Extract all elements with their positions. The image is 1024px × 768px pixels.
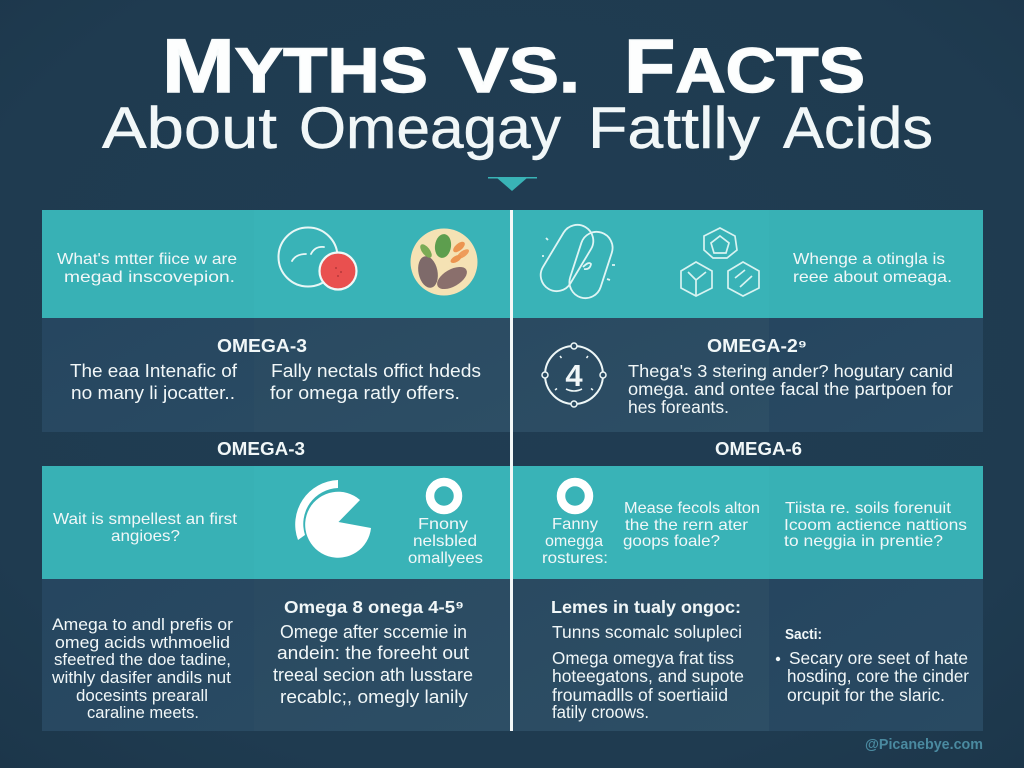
text: top-right question: reee about omeaga. xyxy=(793,269,952,286)
text: top-right question: Whenge a otingla is xyxy=(793,251,945,268)
icon: outlined beans xyxy=(535,219,617,302)
text: right column: recablc;, omegly lanily xyxy=(280,686,469,707)
icon: ring with label: omegga xyxy=(545,533,603,550)
text: left column: docesints prearall xyxy=(76,686,208,705)
text: description: omega. and ontee facal the partpoen for xyxy=(628,379,953,399)
text: middle question: goops foale? xyxy=(623,533,720,550)
panel: top-right teal band xyxy=(513,210,983,318)
text: right question: to neggia in prentie? xyxy=(784,533,943,550)
watermark: @Picanebye.com xyxy=(865,736,983,753)
title line: Myths vs. Facts: MYTHS xyxy=(162,24,428,109)
text: left column xyxy=(70,361,238,403)
icon: ring with label: omallyees xyxy=(408,550,483,567)
text: left column: The eaa Intenafic of xyxy=(70,361,238,381)
heading: Omega-2: OMEGA-2⁹ xyxy=(707,336,807,356)
icon: numbered dial xyxy=(542,343,606,407)
panel: upper-left dark facts xyxy=(42,318,511,432)
icon: ring with label xyxy=(408,482,483,567)
panel: lower-left teal band xyxy=(42,466,511,579)
subtitle: Omeagay xyxy=(299,96,561,161)
icon: outlined circle with red fruit xyxy=(278,228,356,290)
text: middle question xyxy=(623,500,760,550)
subtitle: Fattlly xyxy=(588,96,760,161)
title line: Myths vs. Facts xyxy=(162,24,865,109)
text: bullet item: hosding, core the cinder xyxy=(787,666,969,686)
text: right column: treeal secion ath lusstare xyxy=(273,664,473,685)
text: lower-left question: angioes? xyxy=(111,528,180,545)
heading: Lemes: Lemes in tualy ongoc: xyxy=(551,597,741,617)
text: description: Thega's 3 stering ander? hogutary canid xyxy=(628,361,953,381)
subtitle: Acids xyxy=(783,96,933,161)
text: left column: fatily croows. xyxy=(552,702,649,722)
heading: Omega-3 section: OMEGA-3 xyxy=(217,439,305,459)
text: description: hes foreants. xyxy=(628,397,729,417)
icon: downward triangle marker xyxy=(488,177,537,191)
text: left column: hoteegatons, and supote xyxy=(552,666,744,686)
panel: lower-right teal band xyxy=(513,466,983,579)
text: left column: Omega omegya frat tiss xyxy=(552,648,734,668)
title xyxy=(102,24,933,161)
subtitle xyxy=(102,96,933,161)
icon: three polyhedra xyxy=(681,228,759,296)
title line: Myths vs. Facts: VS. xyxy=(458,36,580,106)
text: top-left question: megad inscovepion. xyxy=(64,269,235,286)
panel: top-left teal band xyxy=(42,210,511,318)
text: lower-left question xyxy=(53,511,238,545)
text: left column: no many li jocatter.. xyxy=(71,383,235,403)
icon: numbered dial: 4 xyxy=(565,358,583,393)
heading: Omega-6 section: OMEGA-6 xyxy=(715,439,802,459)
heading: Omega 8: Omega 8 onega 4-5⁹ xyxy=(284,597,464,617)
text: middle question: the the rern ater xyxy=(625,517,749,534)
text: right column: for omega ratly offers. xyxy=(270,383,460,403)
heading: Sacti: Sacti: xyxy=(785,627,822,643)
text: right question: Tiista re. soils forenuit xyxy=(785,500,952,517)
heading: Omega-3: OMEGA-3 xyxy=(217,336,307,356)
text: right question: Icoom actience nattions xyxy=(784,517,967,534)
text: middle question: Mease fecols alton xyxy=(624,500,760,517)
text: left column: Amega to andl prefis or xyxy=(52,615,233,634)
icon: ring with label: nelsbled xyxy=(413,533,477,550)
text: left column: withly dasifer andils nut xyxy=(51,668,231,687)
text: left column: froumadlls of soertiaiid xyxy=(552,685,728,705)
text: bullet item xyxy=(776,648,969,705)
icon: ring with label: rostures: xyxy=(542,550,608,567)
text: left column xyxy=(552,648,744,722)
text: subheading line: Tunns scomalc solupleci xyxy=(552,622,742,642)
text: left column: caraline meets. xyxy=(87,703,199,722)
panel: lower-right dark facts xyxy=(513,579,983,731)
title line: Myths vs. Facts: FACTS xyxy=(624,24,865,109)
icon: pie chart with arc xyxy=(295,480,371,558)
icon: ring with label xyxy=(542,482,608,567)
icon: plate of nuts and greens xyxy=(410,228,478,296)
text: left column: sfeetred the doe tadine, xyxy=(54,650,231,669)
text: left column: omeg acids wthmoelid xyxy=(55,633,230,652)
text: top-left question xyxy=(57,251,237,286)
panel: lower-left dark facts xyxy=(42,579,511,731)
text: bullet item: orcupit for the slaric. xyxy=(787,685,945,705)
text: right column xyxy=(273,621,473,707)
text: right column: Omege after sccemie in xyxy=(280,621,467,642)
center divider xyxy=(510,210,513,731)
subtitle: About xyxy=(102,96,277,161)
text: right column xyxy=(270,361,481,403)
text: description xyxy=(628,361,953,417)
panel: upper-right dark facts xyxy=(513,318,983,432)
text: bullet item: Secary ore seet of hate xyxy=(789,648,968,668)
text: top-right question xyxy=(793,251,952,286)
text: right question xyxy=(784,500,967,550)
text: lower-left question: Wait is smpellest an first xyxy=(53,511,238,528)
text: right column: Fally nectals offict hdeds xyxy=(271,361,481,381)
text: left column xyxy=(51,615,233,722)
icon: ring with label: Fanny xyxy=(552,516,598,533)
icon: ring with label: Fnony xyxy=(418,516,468,533)
text: right column: andein: the foreeht out xyxy=(277,642,469,663)
text: top-left question: What's mtter fiice w are xyxy=(57,251,237,268)
